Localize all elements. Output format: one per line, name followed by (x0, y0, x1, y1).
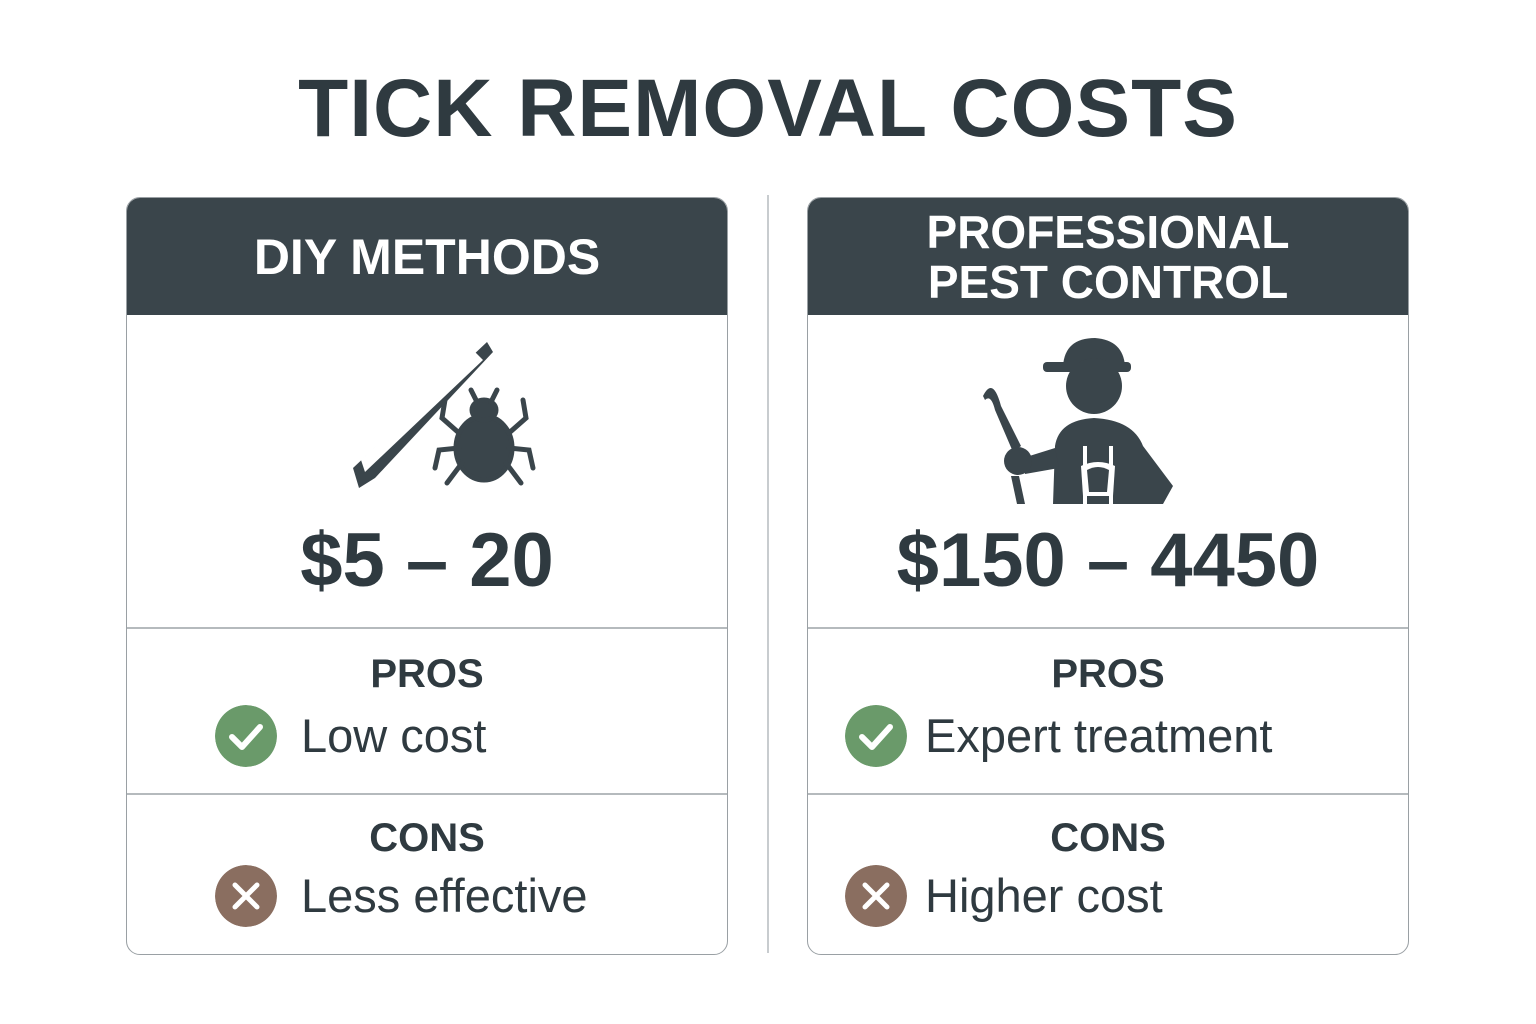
title: TICK REMOVAL COSTS (298, 63, 1238, 154)
header: DIY (127, 198, 727, 315)
panel: professional (807, 197, 1409, 955)
pros pro (845, 652, 1272, 767)
header: professional: PEST CONTROL (928, 256, 1288, 308)
icon: cross (845, 865, 907, 927)
pros pro: Expert treatment (925, 709, 1272, 762)
icon: check (845, 705, 907, 767)
icon: exterminator (983, 338, 1173, 504)
icon: check (215, 705, 277, 767)
panel: DIY methods (126, 197, 728, 955)
cons DIY: CONS (369, 816, 485, 860)
cons pro: CONS (1050, 816, 1166, 860)
header: professional: PROFESSIONAL (927, 206, 1289, 258)
cons DIY: Less effective (301, 869, 588, 922)
pros DIY (215, 652, 486, 767)
pros DIY: PROS (370, 652, 484, 696)
cons DIY (215, 816, 588, 927)
pros pro: PROS (1051, 652, 1165, 696)
header: DIY: DIY METHODS (254, 228, 600, 284)
price DIY: $5 – 20 (300, 518, 554, 603)
cons pro (845, 816, 1166, 927)
icon: tweezers and tick (353, 342, 536, 488)
header: professional (808, 198, 1408, 315)
cons pro: Higher cost (925, 869, 1163, 922)
price pro: $150 – 4450 (897, 518, 1319, 603)
icon: cross (215, 865, 277, 927)
pros DIY: Low cost (301, 709, 486, 762)
center divider (767, 195, 768, 953)
